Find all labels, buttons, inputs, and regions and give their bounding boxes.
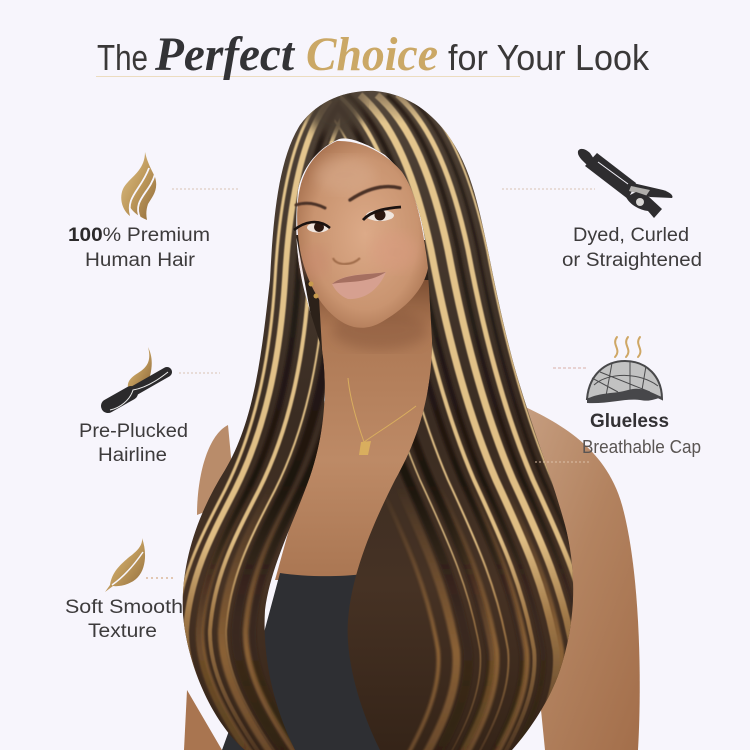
connector line	[179, 372, 220, 374]
feature: soft smooth texture	[65, 538, 183, 642]
under-chin shadow	[332, 310, 428, 350]
crown shadow	[307, 88, 363, 136]
icon: hair flame	[121, 152, 156, 220]
shoulders and arms	[184, 400, 640, 750]
label bold: Glueless	[590, 411, 669, 432]
feature: 100% premium human hair	[68, 152, 240, 271]
label line two: Hairline	[98, 445, 167, 466]
eyebrows	[296, 187, 400, 208]
icon: wig cap	[587, 361, 662, 403]
icon: feather	[105, 538, 145, 592]
blonde highlights	[182, 92, 573, 750]
photo: model with highlighted hair	[170, 85, 640, 750]
hair shadow behind face	[296, 235, 436, 365]
feature: dyed, curled or straightened	[502, 149, 702, 271]
warm lower lengths	[194, 504, 566, 750]
lips	[332, 272, 386, 299]
face	[294, 141, 428, 328]
label line two: Human Hair	[85, 250, 196, 271]
connector line	[172, 188, 240, 190]
connector line on shoulder	[535, 461, 590, 463]
eyes	[294, 207, 401, 232]
nose	[333, 258, 360, 264]
label: Pre-Plucked	[79, 421, 188, 442]
icon: steam	[615, 337, 640, 357]
feature: pre-plucked hairline	[79, 347, 220, 466]
dark lowlights	[199, 95, 604, 750]
icon: curling iron	[578, 149, 673, 218]
title: Choice	[306, 28, 438, 81]
necklace	[348, 378, 416, 455]
label: Breathable Cap	[582, 437, 701, 457]
connector line	[553, 367, 588, 369]
black top	[222, 573, 390, 750]
title: for Your Look	[448, 37, 650, 78]
label: Soft Smooth	[65, 597, 183, 618]
connector line	[146, 577, 175, 579]
neck and chest	[275, 280, 440, 580]
title: The	[97, 37, 148, 78]
earring	[308, 282, 318, 298]
connector line	[502, 188, 595, 190]
label line two: or Straightened	[562, 250, 702, 271]
icon: flat iron with hair	[108, 347, 168, 410]
feature: glueless breathable cap	[535, 337, 701, 462]
label line two: Texture	[88, 621, 157, 642]
label: 100% Premium	[68, 225, 210, 246]
title: Perfect	[154, 28, 296, 81]
hair mass	[182, 90, 574, 750]
title	[96, 28, 650, 81]
label: Dyed, Curled	[573, 225, 689, 246]
